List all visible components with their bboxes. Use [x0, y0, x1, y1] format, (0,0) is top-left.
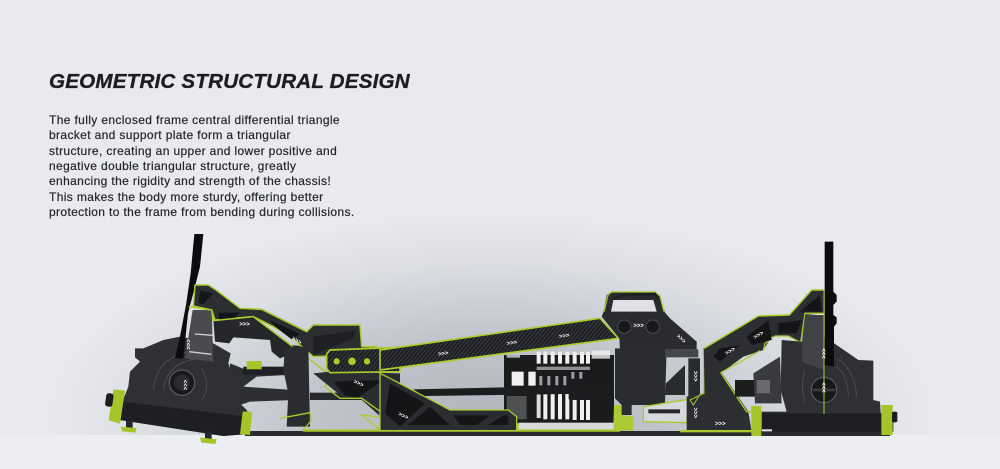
brace cut-outs: [713, 295, 822, 362]
description text: protection to the frame from bending during collisions.: [49, 205, 355, 219]
gusset cut-outs: [333, 380, 400, 413]
direction chevrons: >>>: [822, 382, 828, 393]
rear triangle brace: [687, 290, 824, 432]
title: GEOMETRIC STRUCTURAL DESIGN: [49, 70, 410, 93]
description text: negative double triangular structure, greatly: [49, 159, 296, 173]
housing lower skid: [120, 402, 247, 436]
shock tower: [175, 234, 203, 358]
right section: rear differential and suspension: [680, 242, 897, 436]
vertical post: [283, 347, 310, 427]
direction chevrons: >>>: [822, 348, 828, 359]
motor with heat sink: [504, 351, 614, 423]
left arm and lower links: [228, 361, 400, 405]
description text: [49, 113, 355, 219]
screw stems: [126, 421, 212, 440]
direction chevrons: >>>: [186, 339, 192, 350]
bracket highlights: [189, 334, 213, 354]
housing ribs: [153, 350, 207, 400]
housing lower skid: [762, 413, 893, 432]
bottom rail: [680, 430, 752, 432]
bottom green rail: [517, 405, 633, 431]
lower right bracket: [643, 358, 700, 432]
direction chevrons: >>>: [290, 336, 303, 347]
direction chevrons: >>>: [691, 408, 697, 419]
direction chevrons: >>>: [352, 379, 365, 389]
direction chevrons: >>>: [559, 333, 570, 340]
bracket outline: [189, 307, 330, 387]
description text: This makes the body more sturdy, offering better: [49, 190, 324, 204]
direction chevrons: >>>: [675, 333, 687, 345]
direction chevrons: >>>: [633, 323, 644, 329]
green bushings: [751, 405, 893, 436]
base plate: [245, 431, 890, 436]
support bracket: [185, 310, 213, 362]
housing ribs: [802, 358, 857, 402]
direction chevrons: [186, 322, 365, 389]
carbon plate left end: [327, 347, 400, 373]
plate holes: [333, 357, 371, 366]
differential round port: [169, 370, 195, 395]
direction chevrons: >>>: [753, 330, 765, 341]
upper triangle brace: [193, 285, 377, 357]
support bracket: [802, 315, 824, 370]
green bushings and screws: [109, 389, 252, 444]
top bracket with handle: [602, 292, 697, 349]
under-brace body: [213, 317, 308, 358]
rear differential housing: [762, 337, 882, 428]
differential port: [811, 377, 837, 403]
shock tower: [825, 242, 837, 367]
direction chevrons: [691, 330, 828, 427]
lower triangle gusset: [313, 372, 400, 427]
carbon fiber plate: [380, 318, 618, 370]
center section: carbon plate, motor, transmission: [380, 292, 700, 432]
direction chevrons: >>>: [715, 421, 726, 427]
description text: The fully enclosed frame central differential triangle: [49, 113, 340, 127]
description text: enhancing the rigidity and strength of the chassis!: [49, 174, 331, 188]
direction chevrons: >>>: [691, 371, 697, 382]
drive shaft: [413, 385, 613, 399]
direction chevrons: >>>: [725, 346, 737, 357]
direction chevrons: [397, 323, 687, 422]
vertical green line: [822, 290, 825, 414]
direction chevrons: >>>: [506, 340, 518, 347]
left section: front differential and suspension: [105, 234, 400, 444]
lower green outline: [280, 387, 390, 430]
gusset cut-outs: [385, 383, 508, 427]
direction chevrons: >>>: [397, 412, 410, 422]
differential round port: >>>: [184, 379, 190, 390]
transmission case: [615, 348, 667, 415]
direction chevrons: >>>: [239, 322, 250, 328]
description text: bracket and support plate form a triangular: [49, 128, 291, 142]
direction chevrons: >>>: [438, 351, 449, 358]
brace outline: [704, 290, 824, 348]
front differential housing: [120, 337, 252, 436]
description text: structure, creating an upper and lower positive and: [49, 144, 337, 158]
lower triangular gusset: [380, 373, 517, 431]
brace cut-outs: [199, 291, 357, 355]
output cup and shaft: [735, 357, 782, 403]
